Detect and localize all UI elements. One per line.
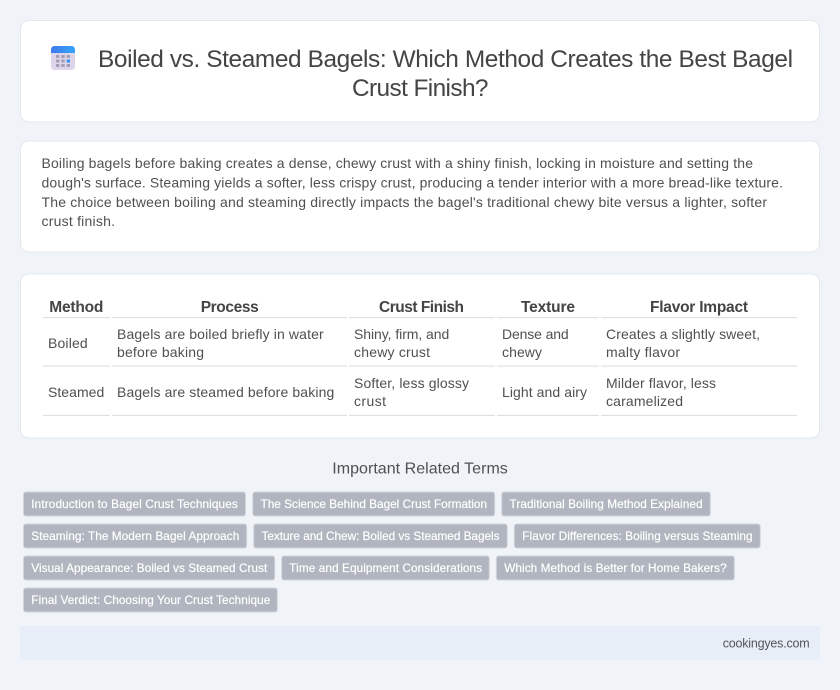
text block: introduction paragraph: crust finish.: [42, 213, 115, 229]
tag: [514, 524, 760, 548]
table row: boiled: chewy: [502, 344, 542, 360]
table row: steamed: [48, 375, 716, 409]
tag list: related terms: [24, 492, 760, 612]
tag: The Science Behind Bagel Crust Formation: [260, 497, 487, 511]
table row: boiled: Dense and: [502, 326, 569, 342]
table row: boiled: chewy crust: [354, 344, 430, 360]
table row: boiled: Creates a slightly sweet,: [606, 326, 760, 342]
tag: Introduction to Bagel Crust Techniques: [31, 497, 238, 511]
tag: Flavor Differences: Boiling versus Steaming: [522, 529, 753, 543]
text block: introduction paragraph: dough's surface. Steaming yields a softer, less crispy crust, producing a tender interior with a more bread-like texture.: [42, 174, 783, 190]
tag: Time and Equipment Considerations: [289, 561, 482, 575]
tag: [254, 524, 507, 548]
footer: cookingyes.com: [723, 636, 810, 650]
text block: introduction paragraph: [42, 155, 783, 229]
table row: steamed: Steamed: [48, 384, 104, 400]
tag: Visual Appearance: Boiled vs Steamed Crust: [31, 561, 268, 575]
tag: [282, 556, 489, 580]
tag: Traditional Boiling Method Explained: [510, 497, 702, 511]
text block: introduction paragraph: Boiling bagels before baking creates a dense, chewy crust with a shiny finish, locking in moisture and setting the: [42, 155, 753, 171]
title: [98, 46, 793, 102]
table header: Texture: [521, 299, 575, 316]
table row: boiled: Bagels are boiled briefly in water: [117, 326, 324, 342]
tag: [253, 492, 495, 516]
tag: Texture and Chew: Boiled vs Steamed Bagels: [262, 529, 500, 543]
title: Crust Finish?: [352, 75, 488, 102]
heading: important related terms: Important Related Terms: [332, 460, 508, 478]
tag: Which Method is Better for Home Bakers?: [504, 561, 727, 575]
table header: Process: [201, 299, 259, 316]
title: Boiled vs. Steamed Bagels: Which Method Creates the Best Bagel: [98, 46, 793, 73]
table row: steamed: caramelized: [606, 393, 683, 409]
table row: boiled: before baking: [117, 344, 204, 360]
panel: introduction: [20, 141, 820, 252]
table row: steamed: Milder flavor, less: [606, 375, 716, 391]
table header: [49, 299, 748, 316]
tag: [24, 524, 247, 548]
tag: [502, 492, 710, 516]
panel: comparison table: [20, 274, 820, 438]
icon: calendar: [51, 46, 75, 70]
table row: steamed: Softer, less glossy: [354, 375, 469, 391]
table row: steamed: Bagels are steamed before baking: [117, 384, 334, 400]
tag: Steaming: The Modern Bagel Approach: [31, 529, 239, 543]
table row: boiled: Boiled: [48, 335, 88, 351]
table row: steamed: crust: [354, 393, 386, 409]
table header: Crust Finish: [379, 299, 464, 316]
tag: [24, 492, 246, 516]
tag: [24, 588, 277, 612]
tag: Final Verdict: Choosing Your Crust Technique: [31, 593, 271, 607]
table row: boiled: [48, 326, 760, 360]
table row: boiled: malty flavor: [606, 344, 680, 360]
table header: Method: [49, 299, 103, 316]
tag: [24, 556, 275, 580]
panel: title card: [20, 20, 820, 122]
footer: [20, 626, 820, 660]
table row: steamed: Light and airy: [502, 384, 587, 400]
tag: [496, 556, 734, 580]
table row: boiled: Shiny, firm, and: [354, 326, 449, 342]
table header: Flavor Impact: [650, 299, 748, 316]
text block: introduction paragraph: The choice between boiling and steaming directly impacts the bagel's traditional chewy bite versus a lighter, softer: [42, 194, 767, 210]
